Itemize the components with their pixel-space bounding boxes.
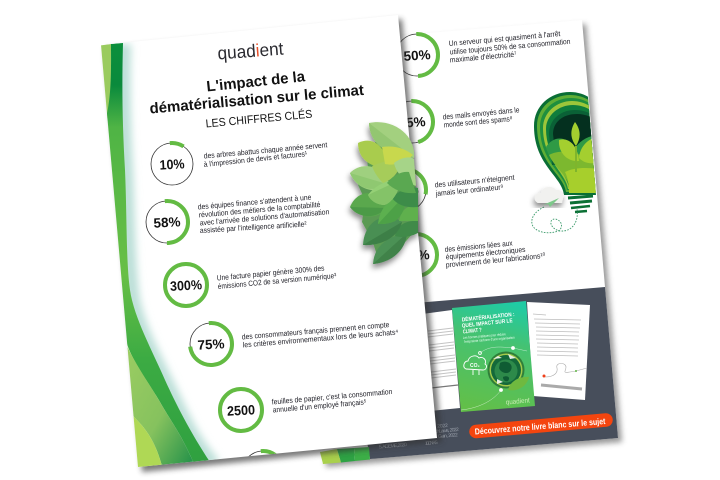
stat: computers left on: jamais leur ordinateur⁹ bbox=[434, 182, 504, 198]
white paper cover: QUEL IMPACT SUR LE bbox=[462, 318, 513, 329]
title: dématérialisation sur le climat bbox=[149, 82, 365, 117]
white paper cover: DÉMATÉRIALISATION : bbox=[461, 310, 515, 323]
icon: leaf cluster bbox=[350, 122, 418, 264]
stat: 50% server: utilise toujours 50% de sa consommation bbox=[449, 37, 571, 56]
icon: cloud bbox=[535, 187, 564, 203]
white paper cover bbox=[452, 301, 535, 412]
icon: paper plane bbox=[543, 198, 559, 207]
title bbox=[149, 68, 365, 130]
stat: 58%: des équipes finance s'attendent à une bbox=[197, 193, 312, 211]
button: Découvrez notre livre blanc sur le sujet bbox=[474, 416, 606, 436]
footnotes: Gain, 2022 bbox=[438, 432, 458, 440]
front page shadow bbox=[105, 19, 442, 472]
stat: 50% server bbox=[395, 29, 571, 77]
panel: front page bbox=[96, 15, 437, 480]
white paper cover: Les bonnes pratiques pour réduire bbox=[463, 332, 506, 340]
footnotes: 5. ADEME,2020 bbox=[379, 442, 407, 450]
back page shadow bbox=[290, 24, 622, 467]
stat: device emissions: des émissions liées aux bbox=[444, 238, 513, 254]
logo: quadient bbox=[217, 39, 284, 63]
white paper cover: CLIMAT ? bbox=[463, 327, 483, 335]
stat: 10%: des arbres abattus chaque année servent bbox=[203, 140, 328, 160]
left document page bbox=[400, 310, 460, 413]
decorative green waves bbox=[96, 43, 214, 470]
stat: 300%: émissions CO2 de sa version numérique³ bbox=[217, 271, 337, 291]
stat: 10% bbox=[149, 140, 328, 187]
stat: computers left on bbox=[383, 168, 516, 212]
stat: 50% server: Un serveur qui est quasiment à l'arrêt bbox=[448, 29, 562, 48]
footnotes: chLaws, 2022 bbox=[435, 427, 459, 435]
icon: bulb base stripes bbox=[568, 196, 593, 212]
stat: 58%: assistée par l'intelligence artificielle² bbox=[200, 219, 307, 235]
title: LES CHIFFRES CLÉS bbox=[205, 108, 313, 130]
stat: computers left on: 45% bbox=[391, 182, 419, 199]
stat: emails spam bbox=[390, 100, 520, 144]
stat: 2500 bbox=[220, 387, 393, 431]
logo on cover: quadient bbox=[506, 397, 530, 406]
stat: 75%: les critères environnementaux lors de leurs achats⁴ bbox=[242, 327, 399, 349]
plant leaves bbox=[558, 122, 594, 164]
icon: dotted flight path bbox=[532, 207, 577, 233]
stat: device emissions: 47% bbox=[402, 247, 430, 264]
stat: 50% server: 50% bbox=[403, 47, 431, 64]
white connector dots bbox=[461, 346, 527, 410]
footer green strip bbox=[320, 447, 370, 464]
footnotes: 10. CNRS bbox=[425, 440, 439, 447]
stat: 300% bbox=[165, 264, 337, 306]
stat: device emissions: équipements électroniques bbox=[445, 245, 526, 261]
right document page bbox=[527, 302, 590, 400]
panel: dark footer bbox=[360, 287, 618, 459]
stat: 58% bbox=[144, 193, 330, 245]
stat: 10%: 10% bbox=[159, 156, 185, 173]
title: L'impact de la bbox=[206, 68, 307, 95]
stat: 2500: annuelle d'un employé français⁵ bbox=[272, 397, 367, 414]
stat: emails spam: monde sont des spams⁸ bbox=[443, 114, 513, 129]
panel: back page bbox=[320, 20, 618, 464]
white paper cover: l'empreinte carbone d'une organisation bbox=[464, 336, 515, 344]
stat: device emissions bbox=[394, 233, 546, 277]
stat: 58%: 58% bbox=[153, 214, 181, 231]
stat: 75%: 75% bbox=[197, 336, 225, 353]
stat: cropped circle bbox=[248, 449, 276, 456]
stat: emails spam: 85% bbox=[398, 114, 426, 131]
footnotes: , 2022 bbox=[435, 423, 448, 430]
stat: 58%: avec l'arrivée de solutions d'automatisation bbox=[199, 207, 330, 227]
stat: 2500: 2500 bbox=[227, 402, 255, 419]
stat: 300%: Une facture papier génère 300% des bbox=[216, 264, 325, 282]
stat: 2500: feuilles de papier, c'est la consommation bbox=[271, 387, 393, 406]
footnotes bbox=[379, 423, 459, 450]
stat: 75%: des consommateurs français prennent en compte bbox=[241, 320, 390, 341]
stat: 75% bbox=[188, 320, 399, 367]
icon: CO2 cloud: CO₂ bbox=[470, 363, 480, 369]
stat: 58%: révolution des métiers de la comptabilité bbox=[198, 200, 321, 219]
icon: light bulb with plant bbox=[534, 92, 596, 195]
icon: globe bbox=[488, 352, 529, 390]
stat: 50% server: maximale d'électricité⁷ bbox=[449, 50, 517, 64]
stat: emails spam: des mails envoyés dans le bbox=[442, 105, 520, 121]
stat: 10%: à l'impression de devis et factures¹ bbox=[203, 149, 308, 169]
stat: device emissions: proviennent de leur fabrications¹⁰ bbox=[445, 251, 546, 269]
stat: 300%: 300% bbox=[170, 277, 202, 294]
stat: computers left on: des utilisateurs n'éteignent bbox=[434, 173, 516, 189]
